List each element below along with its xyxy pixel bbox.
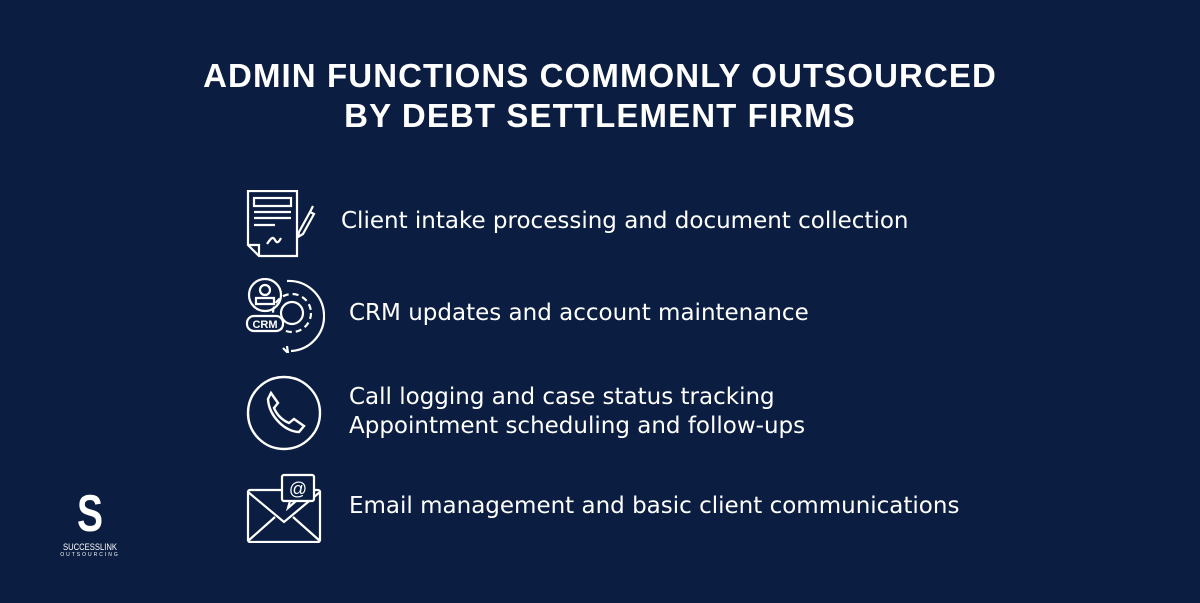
logo [60,485,120,558]
icon: CRM gear [246,278,325,353]
logo: SUCCESSLINK [63,542,117,552]
icon: phone [246,376,322,450]
icon: email: @ [289,479,307,499]
text: item 3 [349,384,805,439]
text: item 2: CRM updates and account maintenance [349,300,809,326]
text: item 1: Client intake processing and document collection [341,208,908,234]
title: ADMIN FUNCTIONS COMMONLY OUTSOURCED [203,57,997,94]
icon: document with pen [246,190,316,258]
text: item 4: Email management and basic client communications [349,493,959,519]
title [203,57,997,134]
text: item 3: Appointment scheduling and follow-ups [349,413,805,439]
logo: OUTSOURCING [60,552,120,558]
logo: S [77,485,103,543]
icon: email [246,474,322,543]
icon: CRM gear: CRM [252,319,278,331]
title: BY DEBT SETTLEMENT FIRMS [344,97,856,134]
text: item 3: Call logging and case status tracking [349,384,775,410]
